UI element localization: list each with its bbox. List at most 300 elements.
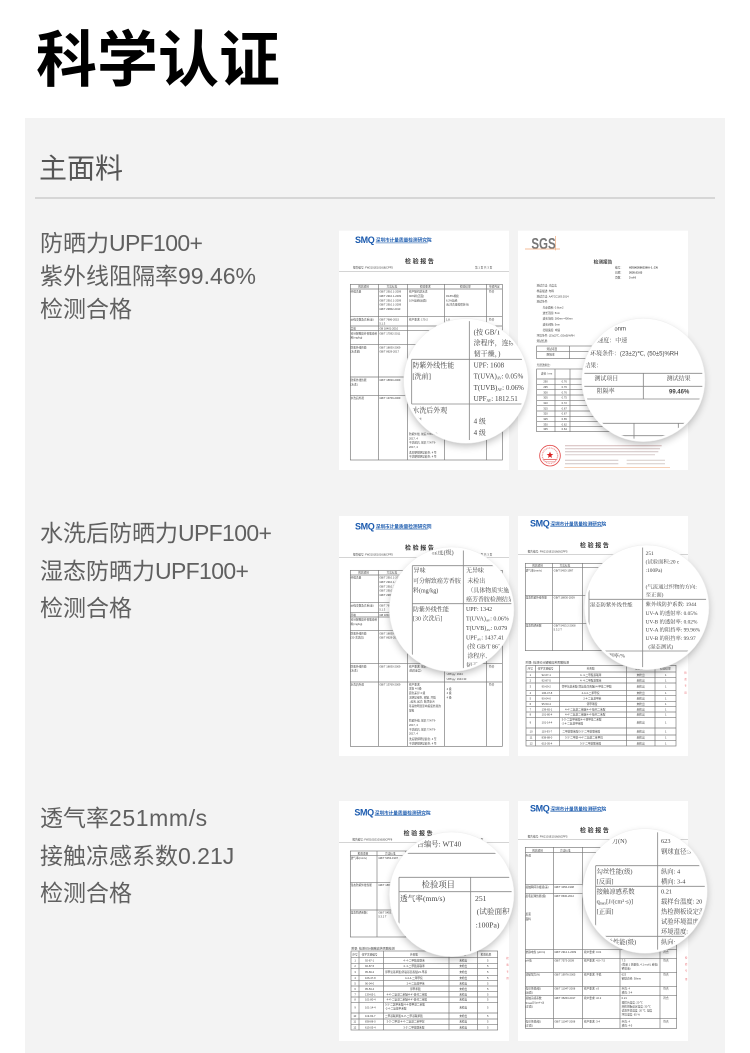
document: SMQ report air permeability: 615-05-4	[365, 1025, 376, 1029]
document: SMQ report 1: 单项判定	[489, 285, 500, 289]
document: SMQ report cool touch: [反面]	[526, 991, 533, 995]
document: SMQ report air permeability: 检	[506, 956, 509, 960]
document: SMQ report 30 washes: GB/T 18830-2009	[379, 631, 401, 635]
document: SMQ report cool touch: 检 验 报 告	[580, 826, 609, 834]
magnifier: cool touch coefficient: 力(N)	[612, 836, 627, 845]
magnifier: cool touch coefficient: 623	[661, 838, 670, 845]
document: SMQ report wet test: 检验结果	[660, 667, 671, 671]
document: SMQ report air permeability: 5	[487, 959, 489, 963]
magnifier: UPF before wash: 棉户要求	[411, 417, 422, 421]
magnifier: wet UPF: 紫外线防护系数: 1944	[646, 600, 697, 608]
magnifier: UPF after 30 washes: 可分解致癌芳香胺	[413, 577, 461, 585]
document: SMQ report air permeability: 未检出	[459, 1006, 468, 1010]
document: SMQ report wet test: 验	[684, 677, 687, 681]
document: SMQ report 30 washes: : 1644.33	[455, 677, 467, 681]
document: SMQ report 30 washes: 防紫外线, 前后 T/X/T9-	[409, 719, 436, 723]
document: SMQ report 1: 10%氨纶[反面]	[409, 298, 427, 302]
document: SMQ report 30 washes: GB/T 7686-2015	[379, 603, 399, 607]
document: SMQ report wet test: 6	[530, 702, 532, 706]
document: SMQ report 30 washes: : 1644	[455, 672, 463, 676]
document: SMQ report air permeability: 139-65-1	[365, 992, 376, 996]
document: SMQ report 1: [水洗]	[351, 382, 358, 386]
document: SGS report	[518, 231, 688, 470]
document: SMQ report wet test: 4- 4-二甲胺基联苯	[580, 678, 602, 682]
document: SMQ report cool touch: 棉户要求: 3-4	[584, 1019, 600, 1023]
document: SMQ report air permeability: 未检出	[459, 976, 468, 980]
magnifier: wet UPF: UV-A 的阻挡率: 99.96%	[646, 626, 701, 634]
text block: after wash and wet UPF100+: 湿态防晒力UPF100+	[40, 558, 248, 584]
magnifier: cool touch coefficient: 载样台温度: 20	[661, 897, 702, 906]
document: SMQ report cool touch: GB/T 3456-1998	[554, 885, 574, 889]
document: SMQ report wet test: 10	[530, 730, 533, 734]
document: SMQ report 30 washes: 干洗硬挺明显颜色: 4 至	[409, 741, 437, 745]
document: SMQ report wet test: 深圳市计量质量检测研究院	[550, 520, 607, 527]
text block: air permeability and cool touch	[40, 805, 234, 906]
document: SMQ report 30 washes: , 起泡, 起壳, 黏黑染污	[409, 700, 435, 704]
magnifier: blocking rate 99.46%: 阻隔率	[597, 387, 615, 395]
magnifier: air permeability: (试验面积	[477, 906, 510, 916]
document: SMQ report air permeability: 5	[487, 976, 489, 980]
document: SMQ report wet test: 1	[665, 702, 667, 706]
document: SMQ report 1: GB/T 17592-2011	[379, 331, 401, 335]
document: SMQ report 30 washes: GB/T 2910.1-2009	[379, 576, 402, 580]
document: SMQ report cool touch: 深圳市计量质量检测研究院	[550, 805, 607, 812]
document: SMQ report wet test: 湿态防晒系数	[526, 624, 542, 628]
icon: red stamp	[540, 445, 560, 466]
magnifier: cool touch coefficient: 试验环境温度	[661, 917, 700, 926]
document: SMQ report wet test: 1	[665, 736, 667, 740]
document: SMQ report wet test: 8	[530, 713, 532, 717]
document: SMQ report wet test: 95-53-4	[542, 702, 551, 706]
document: SMQ report 30 washes	[339, 516, 509, 756]
magnifier: blocking rate 99.46%: 测试项目	[594, 374, 618, 382]
document: SMQ report wet test: 4-4-4-二苯甲烷	[582, 691, 600, 695]
document: SMQ report wet test: 139-65-1	[542, 707, 553, 711]
magnifier: UPF before wash: 水洗后外观	[412, 405, 447, 414]
document: SMQ report air permeability: 106-47-8	[365, 976, 376, 980]
document: SMQ report air permeability: 5	[487, 1006, 489, 1010]
document: SMQ report air permeability: 5	[487, 964, 489, 968]
magnifier: cool touch coefficient: 横向: 3-4	[661, 876, 686, 885]
document: SMQ report 1: GB/T 13769-2009	[379, 396, 401, 400]
magnifier: UPF before wash: UPF	[474, 395, 486, 403]
document: SMQ report wet test: 12	[530, 741, 533, 745]
document: SMQ report 1: [水洗前]	[351, 350, 360, 354]
document: SMQ report cool touch: 棉户要求: ≥0.2	[584, 996, 602, 1000]
document: SMQ report wet test: 1	[665, 741, 667, 745]
document: SMQ report air permeability: 5	[487, 1025, 489, 1029]
document: SMQ report 30 washes: 检验项目	[358, 571, 369, 575]
magnifier: UPF after 30 washes: 料(mg/kg)	[413, 587, 438, 595]
magnifier: wet UPF: (湿态测试)	[648, 643, 673, 651]
document: SMQ report 1: 防紫外线性能	[351, 345, 367, 349]
document: SMQ report air permeability: 检验结果	[481, 952, 492, 956]
document: SMQ report 30 washes: 棉户要求: 前后 T/X/T9	[409, 664, 436, 668]
document: SMQ report cool touch: 棉户要求: 不低	[584, 973, 602, 977]
document: SMQ report cool touch: 面料	[526, 917, 531, 921]
magnifier: air permeability: 透气率(mm/s)	[400, 893, 446, 903]
document: SMQ report 30 washes: GB/T 13769-2009	[379, 682, 401, 686]
document: SMQ report cool touch: [正面]	[526, 1005, 533, 1009]
magnifier: wet UPF	[584, 545, 709, 672]
document: SMQ report cool touch: max	[527, 1002, 533, 1005]
document: SMQ report cool touch: pH值	[526, 959, 532, 963]
document: SMQ report air permeability: 5	[487, 998, 489, 1002]
magnifier: cool touch coefficient: q	[597, 899, 600, 906]
magnifier: UPF after 30 washes: 程度(级)	[432, 549, 454, 557]
document: SMQ report wet test: 湿态防紫外线性能	[526, 596, 547, 600]
magnifier: air permeability	[389, 832, 514, 959]
document: SMQ report 30 washes: 4 级	[447, 687, 452, 691]
magnifier: UPF after 30 washes: [30 次洗后]	[413, 615, 442, 623]
magnifier: UPF before wash: [洗前]	[412, 371, 431, 380]
magnifier: UPF before wash: AV	[486, 399, 492, 403]
document: SMQ report air permeability: 邻甲氧基苯胺(邻氨基茴香醚)/4-甲基	[385, 970, 427, 974]
document: SMQ report wet test: 1	[665, 730, 667, 734]
document: SMQ report air permeability: 4	[354, 976, 356, 980]
magnifier: UPF before wash	[404, 319, 528, 445]
magnifier: cool touch coefficient: 0.21	[661, 889, 672, 896]
document: SMQ report 1: 洗后硬挺明显颜色: 4 至	[409, 450, 437, 454]
document: SMQ report air permeability: 90-04-0	[365, 981, 375, 985]
document: SMQ report 30 washes: 异味	[351, 613, 356, 617]
document: SMQ report cool touch: 棉户要求: ≥3	[584, 987, 600, 991]
document: SMQ report air permeability: GB/T 18830	[378, 883, 393, 887]
document: SMQ report cool touch: GB/T 11047-2008	[554, 1019, 576, 1023]
document: SGS report: 0.67	[562, 406, 567, 410]
document: SMQ report 1: GB 18401-2010	[379, 327, 399, 331]
document: SMQ report 1: GB/T 18830-2009	[379, 378, 401, 382]
magnifier: cool touch coefficient: 纵向:	[661, 937, 676, 946]
document: SMQ report air permeability: 芳香胺	[410, 952, 418, 956]
document: SMQ report air permeability: 6	[354, 987, 356, 991]
row 3 certificates	[339, 801, 707, 1041]
document: SMQ report wet test: 未检出	[637, 736, 645, 740]
document: SMQ report wet test: 芳香胺	[587, 667, 595, 671]
document: SMQ report 30 washes: GB/T 18830-2009	[379, 664, 401, 668]
magnifier: UPF after 30 washes: UPF	[466, 635, 477, 641]
document: SGS report: 测试结果:	[537, 339, 548, 343]
magnifier: blocking rate 99.46%: 速度：中速	[597, 336, 627, 344]
document: SMQ report air permeability: 未检出	[459, 1014, 468, 1018]
document: SMQ report wet test: 5.3.2 T	[554, 628, 562, 632]
document: SGS report: 0.72	[562, 401, 567, 405]
document: SMQ report wet test: 1	[665, 707, 667, 711]
document: SMQ report air permeability: 专	[506, 969, 509, 973]
document: SMQ report 30 washes: 增白 4-5级	[409, 687, 422, 691]
document: SGS report: HZ0902080236/A-1_CN	[629, 266, 658, 270]
document: SMQ report 30 washes: UPF	[447, 673, 452, 676]
document: SMQ report air permeability: 4- 4-二甲胺基联苯	[403, 959, 425, 963]
document: SMQ report 1: GB/T 7686-2015	[379, 317, 399, 321]
document: SMQ report wet test: 未检出	[637, 702, 645, 706]
document: SMQ report wet test: 1	[665, 713, 667, 717]
magnifier: blocking rate 99.46%: 环境条件：(23±2)℃, (50±5)%RH	[590, 349, 678, 357]
document: SMQ report air permeability: 1	[354, 959, 356, 963]
document: SMQ report 30 washes: [30 次洗后]	[351, 636, 364, 640]
document: SMQ report air permeability: 5	[487, 970, 489, 974]
document: SMQ report air permeability: GB/T 5453.2	[378, 910, 394, 914]
document: SGS report: 335	[543, 427, 548, 431]
document: SMQ report 30 washes: 无明显褪色, 褶皱, 开裂	[409, 695, 436, 699]
document: SMQ report air permeability: 湿态防晒系数(	[351, 910, 368, 914]
document: SMQ report cool touch: GB/T 2912.1-2009	[554, 950, 577, 954]
document: SGS report: 日期：	[615, 271, 623, 275]
document: SMQ report air permeability: 未检出	[459, 998, 468, 1002]
document: SMQ report 1: GB/T 2910.1-2009	[379, 298, 402, 302]
document: SMQ report 30 washes: 等其他明显影响着装外观的	[409, 704, 441, 708]
document: SMQ report air permeability: 未检出	[459, 959, 468, 963]
document: SMQ report air permeability: 邻甲苯胺	[410, 987, 421, 991]
document: SMQ report wet test: GB/T 5453.2-2008	[554, 624, 576, 628]
document: SGS report: 330	[543, 422, 548, 426]
document: SGS report: 编号：	[615, 266, 623, 270]
document: SMQ report wet test: 95-69-2	[542, 685, 551, 689]
document: SMQ report 30 washes: 4 级	[447, 691, 452, 695]
document: SMQ report air permeability: 5	[487, 1020, 489, 1024]
magnifier: wet UPF: UV-B 的透射率: 0.02%	[646, 617, 698, 625]
document: SGS report: 阻隔率	[547, 352, 555, 356]
document: SMQ report air permeability: 4-4-4-二苯甲烷	[405, 976, 423, 980]
document: SMQ report 1: GB/T 8629-2017	[379, 350, 399, 354]
magnifier: UPF after 30 washes: AV	[486, 628, 491, 632]
document: SMQ report air permeability: 4- 4-二甲胺基联苯	[403, 964, 425, 968]
document: SMQ report cool touch: 检验项目	[532, 848, 543, 852]
magnifier: cool touch coefficient: 热检测板设定温	[661, 907, 706, 916]
document: SGS report: 波长 / nm	[541, 371, 553, 375]
document: SMQ report wet test: 4-4'-二氨基二苯醚/4-4'-硫代二苯胺	[565, 713, 606, 717]
magnifier: UPF after 30 washes	[389, 547, 514, 674]
document: SMQ report 30 washes: 5.1.3	[379, 607, 386, 611]
magnifier: UPF before wash: (按 GB/T	[474, 327, 501, 336]
document: SMQ report wet test	[518, 516, 688, 756]
document: SMQ report 1: 报告编号: FW2101E1016(8)CPF5	[353, 266, 393, 270]
document: SMQ report air permeability: 5	[487, 981, 489, 985]
document: SMQ report 1: 水洗后外观	[351, 396, 364, 400]
document: SMQ report 30 washes: (前后差异)	[409, 669, 422, 673]
document: SMQ report air permeability: 附录: 检测可分解致癌芳香胺检测	[351, 945, 395, 950]
document: SMQ report cool touch: GB/T 7573-2009	[554, 959, 574, 963]
title: 科学认证	[36, 10, 280, 99]
document: SMQ report air permeability: 二甲基联苯胺/3-3'-二甲基联苯胺	[385, 1014, 423, 1018]
document: SGS report: 0.76	[562, 385, 567, 389]
document: SGS report: 页数：	[615, 275, 623, 279]
document: SMQ report wet test: 1	[665, 685, 667, 689]
document: SMQ report cool touch: 试验环境温度: 20 ℃, 湿度	[622, 1008, 653, 1012]
document: SMQ report air permeability	[339, 801, 509, 1041]
document: SMQ report cool touch: 符合	[663, 973, 669, 977]
document: SMQ report 30 washes: 第 1 页 共 3 页	[475, 552, 493, 556]
magnifier: UPF after 30 washes: （具体物质实施	[467, 586, 509, 594]
magnifier: cool touch coefficient: 接触凉感系数	[597, 887, 635, 896]
document: SMQ report wet test: 检 验 报 告	[580, 541, 609, 549]
document: SMQ report air permeability: 未检出	[459, 987, 468, 991]
document: SGS report: 2020.03.03	[629, 271, 643, 275]
document: SMQ report air permeability: 方法标准	[385, 852, 396, 856]
magnifier: UPF before wash: 防紫外线, 前后 T/X/T9-	[411, 431, 438, 435]
document: SMQ report cool touch: 勾丝性能(级)	[526, 1019, 541, 1023]
document: SMQ report wet test: 化学文摘编号	[538, 667, 554, 671]
document: SMQ report cool touch: 起毛起球性能(级)	[526, 894, 546, 898]
document: SMQ report cool touch: 方法标准	[560, 848, 571, 852]
text block: UPF100+ and UV blocking: 紫外线阻隔率99.46%	[40, 263, 256, 289]
magnifier: UPF after 30 washes: T(UVA)	[466, 617, 486, 623]
magnifier: cool touch coefficient	[583, 829, 707, 955]
document: SMQ report wet test: 附录: 检测可分解致癌芳香胺检测	[526, 659, 569, 664]
document: SMQ report wet test: 90-04-0	[542, 696, 551, 700]
document: SMQ report wet test: GB/T 5453-1997	[554, 568, 574, 572]
magnifier: cool touch coefficient: [J/(cm²·s)]	[606, 899, 633, 906]
document: SMQ report wet test: 专	[684, 684, 687, 688]
text block: UPF100+ and UV blocking: 检测合格	[40, 296, 132, 322]
document: SMQ report wet test: 92-87-5	[542, 678, 551, 682]
document: SMQ report air permeability: 序号	[352, 952, 358, 956]
document: SMQ report wet test: 1	[665, 691, 667, 695]
document: SMQ report 30 washes: 4 级	[447, 695, 452, 699]
magnifier: UPF before wash: 韧干燥，)	[474, 349, 501, 359]
document: SMQ report air permeability: 未检出	[459, 1020, 468, 1024]
text block: after wash and wet UPF100+: 水洗后防晒力UPF100+	[40, 520, 271, 546]
document: SMQ report wet test: 92-67-1	[542, 673, 551, 677]
document: SMQ report cool touch: 反面	[526, 912, 531, 916]
document: SMQ report 30 washes: GB 18401-2010	[379, 613, 399, 617]
document: SMQ report cool touch: 符合	[663, 959, 669, 963]
document: SMQ report wet test: -2-4-二氨基甲苯胺	[562, 722, 584, 726]
document: SMQ report cool touch: 勾丝性能(级)	[526, 987, 541, 991]
magnifier: air permeability: 检验项目	[422, 880, 455, 890]
document: SGS report: 测试项目	[547, 347, 558, 351]
document: SMQ report 1: 干洗前后, 前后 T/X/T9-	[409, 441, 436, 445]
document: SGS report: 0.67	[562, 412, 567, 416]
document: SMQ report 1: 5.1.3	[379, 321, 386, 325]
document: SMQ report cool touch: 棉户要求: 0.01	[584, 950, 602, 954]
document: SMQ report cool touch: 环境湿度: 65 %	[622, 1012, 640, 1016]
document: SMQ report 1: 干洗硬挺明显颜色: 4 至	[409, 455, 437, 459]
document: SMQ report wet test: 3-3'-二甲基-4-4'-二氨基二苯甲烷	[565, 736, 603, 740]
document: SMQ report cool touch: 横向: 4-5	[622, 1023, 633, 1027]
magnifier: UPF before wash: : 0.05%	[502, 373, 524, 381]
document: SGS report: 测试方法: AATCC183:2014	[537, 294, 569, 298]
magnifier: wet UPF: (气流通过织物的方向:	[646, 582, 697, 590]
document: SGS report: 波长范围: 280nm~400nm	[543, 317, 573, 321]
document: SMQ report air permeability: 深圳市计量质量检测研究院	[375, 809, 431, 816]
heading: main fabric: 主面料	[39, 147, 123, 187]
document: SGS report: 320	[543, 412, 548, 416]
magnifier: cool touch coefficient: 勾丝性能(级)	[597, 866, 633, 875]
document: SMQ report cool touch: 检	[685, 955, 688, 959]
document: SMQ report 1: 棉户要求: 175-2	[409, 317, 428, 321]
document: SMQ report air permeability: 838-88-0	[365, 1020, 376, 1024]
document: SMQ report air permeability: 12	[353, 1025, 357, 1029]
magnifier: UPF before wash: 规格	[411, 422, 417, 426]
document: SMQ report 1: 符合	[489, 317, 495, 321]
document: SMQ report air permeability: 用	[506, 976, 509, 980]
document: SMQ report cool touch: 0.21	[622, 996, 627, 1000]
document: SMQ report wet test: 报告编号: FW2101E1016(8)CPF5	[528, 549, 568, 553]
magnifier: cool touch coefficient: 纵向: 4	[661, 866, 681, 875]
document: SMQ report cool touch: 专	[685, 969, 688, 973]
document: SMQ report air permeability: 检 验 报 告	[404, 830, 433, 838]
document: SMQ report air permeability: 3-3'-二氯甲苯胺/4-4-亚甲基二苯胺	[385, 1003, 425, 1007]
document: SMQ report 30 washes: [水洗]	[351, 669, 358, 673]
magnifier: cool touch coefficient: max	[600, 902, 606, 906]
document: SMQ report 1: 1.8	[446, 317, 450, 321]
document: SMQ report 30 washes: UPF	[447, 678, 452, 681]
document: SMQ report wet test: 未检出	[637, 741, 645, 745]
document: SMQ report 1: SMQ	[355, 235, 375, 245]
document: SMQ report 1: 可分解致癌芳香胺染料	[351, 331, 378, 335]
document: SMQ report wet test: 3	[530, 685, 532, 689]
document: SMQ report wet test: 方法标准	[560, 564, 571, 568]
document: SMQ report wet test: 1	[665, 678, 667, 682]
document: SMQ report 1: 纤维含量	[351, 290, 362, 294]
document: SMQ report 30 washes: 纤维含量	[351, 576, 362, 580]
document: SMQ report air permeability: 5	[487, 992, 489, 996]
document: SGS report: 测试条件:	[537, 300, 548, 304]
document: SMQ report wet test: 101-14-4	[542, 721, 553, 725]
document: SMQ report cool touch: 热检测板设定温度: 30 ℃	[622, 1004, 651, 1008]
document: SMQ report air permeability: 未检出	[459, 1025, 468, 1029]
row 2 certificates	[339, 516, 709, 756]
document: SMQ report 30 washes: 2017, 4	[409, 723, 418, 727]
document: SMQ report air permeability: 第 2 页	[475, 837, 484, 841]
document: SMQ report 1: 纱线支数及克重(差)	[351, 317, 374, 321]
text block: air permeability and cool touch: 检测合格	[40, 880, 132, 906]
magnifier: air permeability: 251	[475, 894, 487, 903]
document: SMQ report 30 washes: AV	[452, 673, 456, 677]
document: SMQ report 1: GB/T 18830-2009	[379, 345, 401, 349]
document: SMQ report wet test: 邻甲氧基苯胺(邻氨基茴香醚)/4-甲基二甲胺	[562, 685, 612, 689]
document: SMQ report cool touch: 顶破强力(N)	[526, 973, 540, 977]
document: SMQ report 1: 符合	[489, 290, 495, 294]
document: SMQ report wet test: 2	[530, 678, 532, 682]
magnifier: UPF before wash: 4 级	[474, 416, 486, 425]
document: SMQ report air permeability: 4-4'-二氨基二苯醚/4-4'-硫代二苯胺	[387, 998, 427, 1002]
document: SMQ report wet test: 615-05-4	[542, 741, 553, 745]
document: SMQ report air permeability: 报告编号: FW2101E1016(8)CPF8	[352, 837, 393, 841]
document: SMQ report wet test: 未检出	[637, 691, 645, 695]
magnifier: UPF before wash: T(UVB)	[474, 384, 497, 392]
document: SMQ report air permeability: SMQ	[354, 808, 374, 818]
document: SMQ report air permeability: 101-80-4	[365, 998, 376, 1002]
magnifier: UPF after 30 washes: AV	[477, 637, 482, 641]
magnifier: UPF after 30 washes: : 0.079	[491, 626, 507, 632]
document: SGS report: 波长范围: 5nm	[543, 311, 561, 315]
document: SGS report: 光束面积: 0.8cm2	[543, 305, 564, 309]
text block: air permeability and cool touch: 接触凉感系数0.21J	[40, 843, 234, 869]
document: SMQ report air permeability: 7	[354, 992, 356, 996]
document: SMQ report wet test: 119-93-7	[542, 730, 553, 734]
document: SGS report: 波长间隔: 5nm	[543, 322, 561, 326]
document: SMQ report air permeability: 未检出	[459, 970, 468, 974]
document: SMQ report wet test: 101-80-4	[542, 713, 553, 717]
document: SMQ report wet test: 邻甲苯胺	[587, 702, 598, 706]
document: SMQ report 1: 异味	[351, 327, 356, 331]
document: SMQ report 1: 方法标准	[387, 285, 398, 289]
document: SMQ report wet test: 7	[530, 707, 532, 711]
document: SGS report: 环境条件: (23±2)℃, (50±5)%RH	[537, 334, 574, 338]
magnifier: air permeability: :100Pa)	[476, 921, 500, 930]
document: SMQ report wet test: 检验项目	[532, 564, 543, 568]
magnifier: UPF before wash: : 0.06%	[502, 384, 524, 392]
document: SMQ report 30 washes: 防紫外线性能	[351, 664, 367, 668]
document: SGS report: 0.76	[562, 390, 567, 394]
magnifier: wet UPF: (试验面积:20 c	[646, 557, 680, 565]
magnifier: UPF after 30 washes: : 0.06%	[490, 617, 509, 623]
document: SMQ report wet test: 未检出	[637, 730, 645, 734]
document: SMQ report wet test: 3-3'-二甲基联苯胺	[580, 741, 602, 745]
document: SMQ report cool touch: 符合	[663, 987, 669, 991]
